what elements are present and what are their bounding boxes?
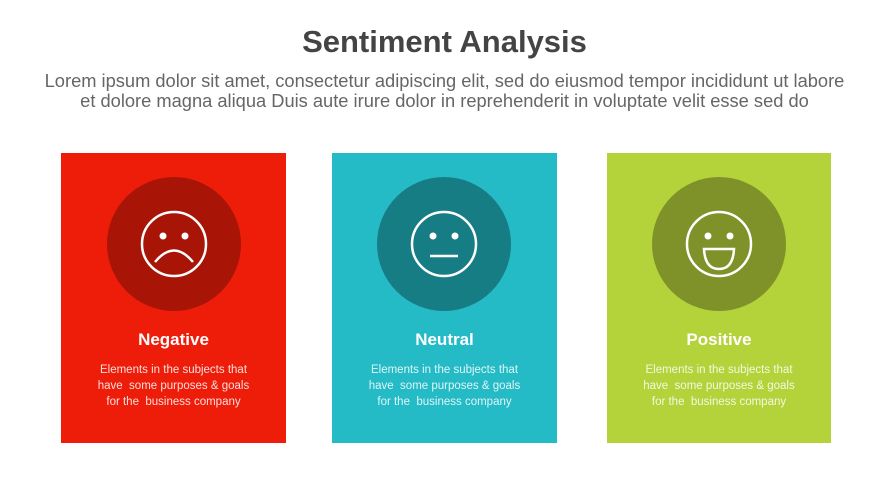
- text: Elements in the subjects that: [645, 364, 793, 376]
- text: have some purposes & goals: [369, 380, 520, 392]
- icon: happy face: [652, 177, 786, 311]
- icon: neutral face: [377, 177, 511, 311]
- title: Sentiment Analysis: [302, 24, 587, 59]
- text: for the business company: [377, 396, 512, 408]
- text: [643, 364, 795, 408]
- heading: Negative: [138, 330, 209, 349]
- text: have some purposes & goals: [98, 380, 249, 392]
- text: Elements in the subjects that: [371, 364, 518, 376]
- subtitle: et dolore magna aliqua Duis aute irure dolor in reprehenderit in voluptate velit esse sed do: [80, 90, 809, 111]
- heading: Positive: [686, 330, 752, 349]
- heading: Neutral: [415, 330, 474, 349]
- panel: positive: [607, 153, 831, 443]
- subtitle: [45, 70, 844, 111]
- icon: sad face: [107, 177, 241, 311]
- text: Elements in the subjects that: [100, 364, 247, 376]
- text: for the business company: [106, 396, 241, 408]
- subtitle: Lorem ipsum dolor sit amet, consectetur adipiscing elit, sed do eiusmod tempor incididunt ut labore: [45, 70, 844, 91]
- text: [369, 364, 520, 408]
- panel: neutral: [332, 153, 557, 443]
- text: have some purposes & goals: [643, 380, 795, 392]
- text: [98, 364, 249, 408]
- text: for the business company: [652, 396, 786, 408]
- panel: negative: [61, 153, 286, 443]
